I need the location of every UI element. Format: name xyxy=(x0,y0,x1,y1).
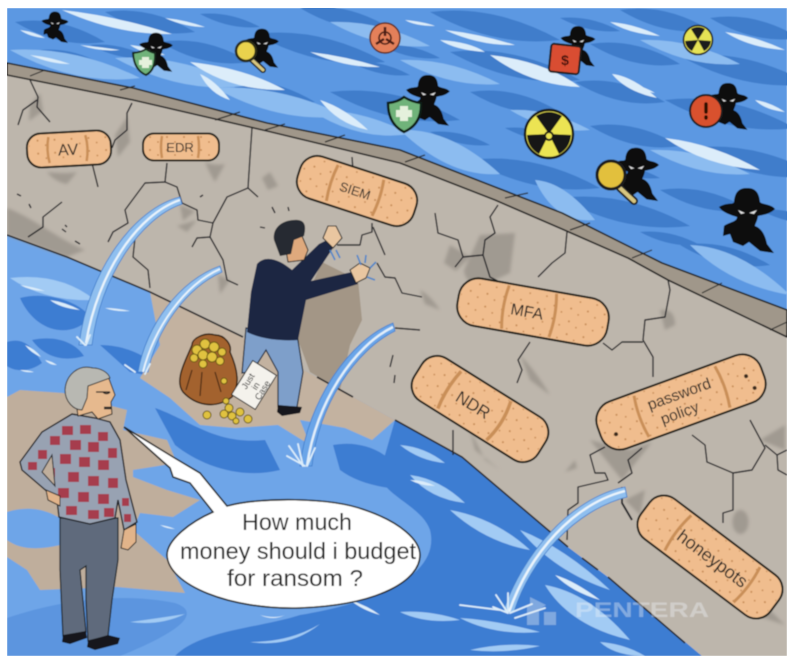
bandage: honeypots: honeypots xyxy=(673,526,752,592)
ground: tan floor near the wall xyxy=(140,292,395,445)
note: Just in Case: in xyxy=(250,380,262,392)
ledge joints xyxy=(30,70,787,330)
ground: tan floor behind old man xyxy=(7,390,200,593)
foam on lower water xyxy=(15,285,600,618)
bandage: EDR xyxy=(143,134,219,160)
shadow of the man on the wall xyxy=(298,262,362,390)
background: lower flood water xyxy=(7,230,702,656)
hoodie xyxy=(247,240,358,340)
water seeping under hands xyxy=(330,250,376,280)
bag of gold coins xyxy=(180,334,252,424)
bandage: password policy: policy xyxy=(658,399,702,428)
bandage: SIEM: SIEM xyxy=(338,179,372,203)
hacker with ransom tablet xyxy=(549,26,595,74)
speech bubble xyxy=(124,427,420,608)
bandage: SIEM xyxy=(295,154,419,228)
note: Just in Case: Just xyxy=(239,371,257,391)
wall stains xyxy=(7,93,785,625)
lighter water streaks xyxy=(10,277,645,656)
gap between arm and body xyxy=(42,455,55,486)
hair xyxy=(274,220,305,256)
watermark: PENTERA: PENTERA xyxy=(575,599,709,622)
hacker with magnifying glass xyxy=(236,29,279,70)
bandage: password policy xyxy=(594,352,768,452)
hacker with red alert xyxy=(690,83,748,130)
hand lower xyxy=(350,263,370,283)
bandage: AV xyxy=(26,130,112,168)
note: Just in Case: Case xyxy=(253,379,272,402)
dark water patches xyxy=(15,7,795,266)
face and neck xyxy=(76,372,115,419)
hand on hip xyxy=(46,490,60,506)
hacker with green shield xyxy=(133,33,173,75)
hacker with wide hat far left xyxy=(42,12,68,43)
background: upper flood water xyxy=(7,7,795,338)
lighter water near the wall xyxy=(10,22,790,295)
wall bottom edge line xyxy=(7,235,685,643)
water jet 3 xyxy=(300,323,395,466)
water jet 1 xyxy=(79,197,182,345)
old man asking the question xyxy=(20,367,137,650)
speech text: for ransom ? xyxy=(227,565,363,591)
bandage: password policy: password xyxy=(645,375,713,414)
wall top ledge xyxy=(7,63,787,337)
jeans xyxy=(242,328,303,407)
speech text: How much xyxy=(242,509,352,535)
bandage: MFA xyxy=(454,275,612,349)
hacker large far right xyxy=(719,188,775,253)
hair xyxy=(65,367,110,410)
water splashes xyxy=(77,335,545,618)
plaid shirt xyxy=(20,414,137,530)
face xyxy=(284,236,308,262)
note: Just in Case xyxy=(232,361,277,410)
hand upper xyxy=(323,226,342,248)
foam highlights xyxy=(20,10,785,170)
bandage: NDR xyxy=(410,354,550,464)
bandage: MFA: MFA xyxy=(509,301,545,324)
icon: large radiation symbol xyxy=(525,110,573,158)
shoe xyxy=(277,405,302,416)
water jet 4 xyxy=(503,487,627,612)
shirt plaid red squares xyxy=(28,425,131,522)
hacker with ransom tablet: $ xyxy=(561,52,569,68)
dark water under and around the speech bubble xyxy=(175,420,702,656)
wall cracks xyxy=(17,80,787,540)
icon: biohazard xyxy=(370,23,400,53)
bandage: NDR: NDR xyxy=(452,387,494,423)
hacker with shield, mid xyxy=(388,75,450,132)
speech text: money should i budget xyxy=(180,538,417,564)
hacker with yellow magnifier xyxy=(597,148,659,201)
speech text xyxy=(180,509,417,591)
water jet 2 xyxy=(138,266,222,372)
water patch left of old man xyxy=(7,509,65,548)
icon: small radiation symbol xyxy=(684,26,712,54)
watermark: PENTERA xyxy=(527,597,709,625)
shoes xyxy=(62,631,120,650)
trousers xyxy=(60,518,118,641)
bandage: honeypots xyxy=(630,488,790,626)
hanging hand xyxy=(121,524,136,550)
glasses and moustache xyxy=(96,392,110,394)
bandage: EDR: EDR xyxy=(166,140,194,155)
bandage: AV: AV xyxy=(58,142,79,160)
man plugging the wall xyxy=(242,220,376,416)
